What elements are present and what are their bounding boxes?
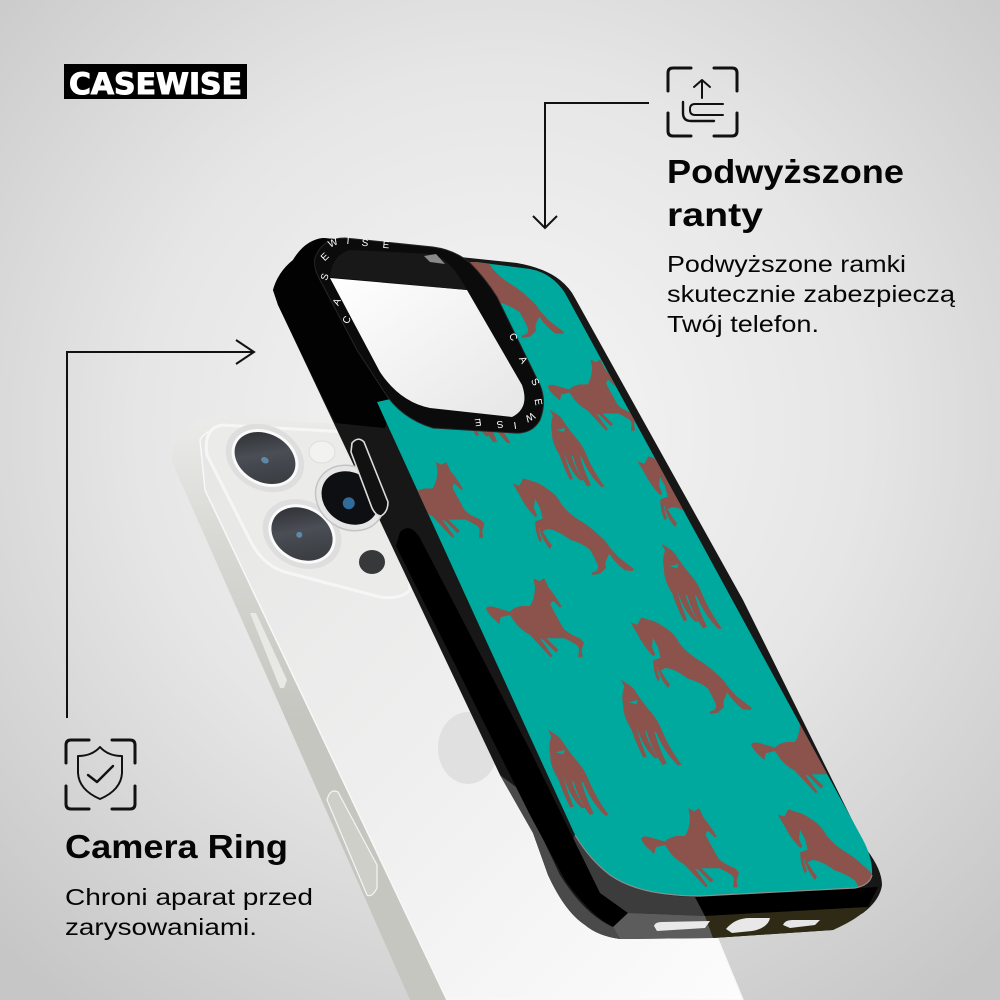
charging port (726, 918, 770, 933)
text: raised edges description: Podwyższone ramki (667, 251, 906, 277)
ring lettering: A (516, 355, 529, 366)
heading: raised edges line two: ranty (667, 196, 764, 233)
apple logo (438, 712, 498, 784)
text: raised edges description: skutecznie zabezpieczą (667, 281, 956, 307)
ring lettering: E (532, 398, 544, 407)
horse running left (418, 462, 484, 538)
ring lettering: I (346, 236, 350, 247)
ring lettering: S (496, 418, 504, 429)
ring lettering: W (327, 236, 340, 250)
logo: CASEWISE (69, 67, 242, 101)
mic port (783, 920, 820, 928)
horse rearing bottom right (778, 809, 872, 886)
side button (327, 791, 377, 896)
ring lettering: E (474, 416, 482, 427)
bottom black bar (695, 887, 878, 916)
teal back panel (377, 262, 872, 896)
case bottom lip translucent (560, 835, 705, 916)
text: camera ring description: zarysowaniami. (65, 914, 257, 940)
ring lettering: S (361, 238, 369, 249)
text: raised edges description: Twój telefon. (667, 311, 819, 337)
ring lettering: E (319, 251, 332, 264)
ring lettering: S (319, 272, 332, 282)
flash (309, 441, 335, 463)
camera opening (330, 278, 524, 417)
horse standing lower (621, 680, 682, 766)
heading: raised edges: Podwyższone (667, 153, 904, 190)
case outer translucent edge (500, 775, 620, 939)
horse running upper (548, 360, 636, 431)
ring lettering: C (506, 331, 519, 343)
panel edge highlight (575, 835, 872, 896)
horse standing left (548, 730, 609, 816)
ring highlight (424, 254, 445, 264)
horse standing upper (550, 410, 604, 487)
case body (273, 238, 882, 939)
text: raised edges description (667, 251, 956, 337)
horse under ring (474, 431, 510, 444)
horse rearing center (513, 478, 634, 575)
horse top partial (470, 262, 564, 338)
bottom left strip (613, 913, 713, 939)
horse rearing upper right (638, 456, 684, 527)
ring lettering: C (341, 315, 354, 326)
horse running bottom (641, 808, 739, 887)
camera ring (315, 238, 544, 433)
heading: camera ring: Camera Ring (65, 828, 288, 865)
ring lettering: S (528, 377, 541, 388)
ring lettering: I (513, 419, 517, 430)
horse running center (486, 578, 584, 657)
case upper dark side (273, 238, 433, 428)
arrow: raised edges (533, 103, 649, 228)
white phone (172, 410, 743, 1000)
ring lettering: W (522, 409, 537, 424)
icon: shield (66, 740, 135, 809)
side power button (351, 439, 388, 516)
camera plateau (206, 425, 410, 598)
arrow: camera ring (67, 340, 254, 718)
phone frame (172, 416, 743, 1000)
sensor (359, 550, 385, 574)
horse running right (751, 724, 828, 794)
volume button (250, 613, 287, 688)
text: camera ring description (65, 884, 313, 940)
bottom olive strip (705, 907, 868, 938)
horse standing right (662, 544, 722, 629)
horse rearing lower (631, 617, 752, 714)
horse pattern (390, 241, 899, 906)
phone back (200, 428, 743, 1000)
ring inner wall (330, 250, 467, 290)
lens middle seen through case (303, 452, 397, 544)
ring lettering: A (331, 297, 344, 308)
speaker port (654, 921, 710, 931)
ring lettering: E (382, 240, 390, 251)
lens top (214, 410, 316, 506)
lens bottom (250, 486, 354, 582)
icon: raised edges (668, 68, 737, 136)
ring lettering (319, 236, 544, 430)
black phone case (273, 236, 899, 939)
text: camera ring description: Chroni aparat przed (65, 884, 313, 910)
side cutout (396, 528, 628, 927)
